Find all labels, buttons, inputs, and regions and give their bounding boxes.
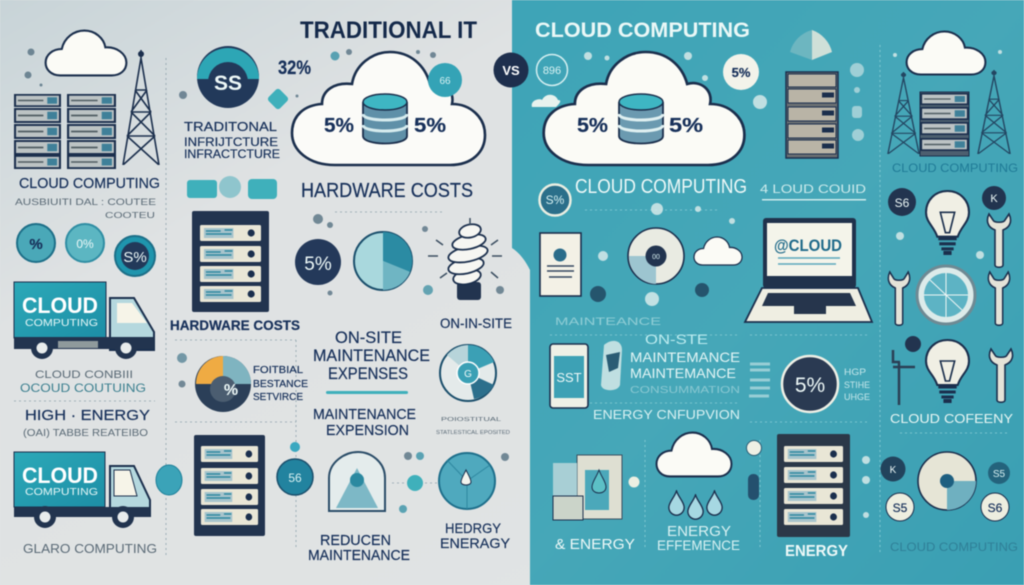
server stack right — [786, 72, 838, 158]
hardware costs heading: HARDWARE COSTS — [301, 180, 473, 202]
segmented circle: G — [464, 369, 472, 380]
teal badge: 66 — [439, 76, 451, 87]
beaker icon — [601, 341, 622, 390]
teal pie with drop — [439, 453, 495, 509]
title: traditional IT: TRADITIONAL IT — [300, 17, 477, 44]
small floating cloud — [532, 95, 560, 107]
background: cloud computing side — [512, 0, 1024, 585]
database icon right — [619, 94, 663, 144]
maintenance faded heading: MAINTEANCE — [555, 316, 661, 328]
pie chart cream: 00 — [652, 254, 660, 261]
cloud computing heading right: CLOUD COMPUTING — [575, 176, 747, 198]
segmented circle — [440, 345, 496, 401]
maintenance expension label — [313, 406, 416, 439]
cloud percentages left: 5% — [414, 115, 446, 137]
truck 1 — [14, 282, 154, 359]
maintenance expension label: EXPENSION — [326, 422, 409, 439]
navy circle 5 percent: 5% — [795, 374, 825, 397]
upper right: tag S6 — [888, 188, 916, 216]
circle 896 — [536, 54, 568, 86]
upper wrench — [987, 214, 1011, 267]
pie side label: FOITBIAL — [253, 365, 303, 376]
secondary cloud label: 4 LOUD COUID — [760, 182, 866, 196]
truck 1: COMPUTING — [25, 318, 98, 329]
phone: SST — [556, 370, 582, 385]
percent 32: 32% — [278, 58, 311, 79]
on-site maintenance heading right: ON-STE — [645, 331, 708, 347]
left column: cloud icon — [46, 31, 126, 75]
truck 1 caption — [20, 369, 146, 395]
upper right: tag S6: S6 — [895, 196, 910, 210]
energy consumption label: ENERGY CNFUPVION — [593, 407, 740, 422]
truck 2: CLOUD — [22, 463, 98, 488]
teal underline — [326, 391, 408, 394]
pie chart with percent: % — [224, 382, 238, 399]
decorative scatter: left panel — [24, 48, 509, 513]
energy efficiency label — [657, 523, 740, 553]
left column: cloud computing label: CLOUD COMPUTING — [19, 175, 160, 192]
center-left: donut chart: SS — [214, 72, 242, 95]
small cloud right — [694, 237, 742, 265]
bottom right badges: S5 — [993, 469, 1006, 480]
right column: cloud computing label: CLOUD COMPUTING — [892, 161, 1018, 175]
teal bubble — [156, 465, 182, 495]
white circle 5 percent: 5% — [732, 65, 751, 80]
on-site maintenance heading right: MAINTEMANCE — [630, 349, 740, 365]
pie chart cream — [628, 228, 684, 284]
reduced maintenance label — [308, 532, 410, 564]
upper bulb — [926, 191, 969, 253]
cloud percentages left — [324, 115, 446, 137]
server rack 1 — [192, 211, 269, 312]
center-left: donut chart — [197, 46, 259, 108]
left column: sub label — [15, 197, 156, 220]
left lower wrench — [888, 272, 910, 325]
traditional infrastructure label: INFRACTCTURE — [184, 147, 280, 161]
hardware costs label: HARDWARE COSTS — [170, 317, 300, 333]
white circle 5 percent — [723, 54, 759, 90]
stripes — [749, 364, 770, 396]
on-site maintenance expenses heading: MAINTENANCE — [313, 346, 430, 365]
pie side label: SETVIRCE — [253, 392, 303, 403]
cloud coffeeny label: CLOUD COFEENY — [890, 411, 1013, 426]
energy cloud — [656, 433, 732, 476]
small dark tag — [905, 336, 921, 352]
lower tool left — [893, 350, 915, 405]
energy efficiency label: EFFEMENCE — [657, 537, 740, 553]
vs badge: VS — [502, 63, 520, 78]
small label stack: HGP — [844, 367, 866, 377]
pie side label: BESTANCE — [253, 379, 308, 390]
& energy label: & ENERGY — [555, 536, 635, 553]
truck 2 — [14, 452, 150, 528]
big cloud right — [544, 52, 744, 165]
cloud percentages right: 5% — [577, 115, 608, 137]
energy saving bulb — [428, 218, 502, 300]
energy label bottom: ENERGY — [785, 543, 848, 560]
truck 1 caption: CLOUD CONBIII — [35, 369, 133, 381]
upper right: tag K: K — [990, 193, 998, 205]
percent ring: S% — [546, 193, 565, 207]
heavy energy label — [440, 520, 511, 551]
decorative scatter: right panel — [584, 50, 1002, 518]
heavy energy label: HEDRGY — [445, 520, 502, 536]
left column: sub label: AUSBIUITI DAL : COUTEE — [15, 197, 156, 207]
on-site maintenance expenses heading: EXPENSES — [328, 364, 408, 383]
left column: server stacks — [15, 95, 115, 168]
faded pie — [790, 30, 832, 60]
circle 56: 56 — [288, 471, 302, 485]
right column: server stack — [920, 92, 969, 156]
laptop — [745, 218, 872, 322]
cloud percentages left: 5% — [324, 115, 354, 137]
fine print — [436, 417, 510, 436]
heavy energy label: ENERAGY — [440, 535, 511, 551]
server rack 2 — [194, 435, 265, 536]
maintenance dome icon — [329, 452, 385, 511]
lower bulb — [926, 340, 969, 401]
right column: towers — [888, 70, 1010, 154]
on-site maintenance expenses heading — [313, 328, 430, 383]
teal diamond connector — [392, 475, 437, 491]
left column: sub label: COOTEU — [105, 211, 155, 220]
small label stack: UHGE — [844, 392, 870, 402]
bottom right pie — [918, 452, 976, 510]
cloud percentages right: 5% — [669, 115, 703, 137]
right column: cloud icon — [907, 32, 985, 74]
left column: percent circles: S% — [123, 249, 147, 266]
big cloud left — [292, 52, 485, 165]
navy circle 5 percent — [782, 356, 838, 412]
traditional infrastructure label: TRADITONAL — [184, 119, 277, 134]
lower wrench — [989, 349, 1013, 402]
document card — [540, 233, 581, 296]
vs badge — [494, 52, 528, 88]
pie side label — [253, 365, 308, 403]
small white dot — [628, 476, 640, 488]
secondary cloud label — [760, 182, 866, 200]
percent ring — [540, 184, 570, 216]
circle 5 percent — [295, 239, 341, 285]
bottom right badges: K — [890, 465, 897, 476]
right title: cloud computing: CLOUD COMPUTING — [535, 19, 750, 42]
cloud computing label bottom right: CLOUD COMPUTING — [890, 540, 1018, 554]
right lower wrench — [988, 272, 1010, 325]
teal badge — [428, 63, 462, 97]
bubbles under pie — [590, 283, 709, 306]
reduced maintenance label: MAINTENANCE — [308, 547, 410, 564]
small label stack — [844, 367, 870, 402]
cloud percentages right — [577, 115, 703, 137]
bottom right badges: S5 — [893, 501, 908, 515]
energy efficiency label: ENERGY — [667, 523, 731, 540]
left column: percent circles — [17, 224, 155, 276]
high energy sub label: (OAI) TABBE REATEIBO — [23, 428, 148, 439]
truck 1: CLOUD — [22, 293, 98, 318]
circle 5 percent: 5% — [304, 254, 332, 275]
drop dot — [290, 442, 300, 452]
truck 2 caption: GLARO COMPUTING — [23, 541, 157, 556]
fine print: STATLESTICAL EPOSITED — [436, 430, 510, 436]
bottom right badges — [880, 456, 1010, 521]
server rack right — [777, 434, 850, 537]
decorative icons column — [850, 63, 864, 141]
truck 2: COMPUTING — [25, 487, 98, 498]
globe — [917, 266, 975, 324]
truck 1 caption: OCOUD COUTUING — [20, 381, 146, 395]
bottom right badges: S6 — [988, 501, 1003, 515]
laptop: @CLOUD — [774, 236, 842, 255]
left column: radio tower — [123, 50, 159, 165]
phone — [550, 344, 588, 408]
connector icons — [746, 440, 762, 500]
document with drop illustration — [553, 455, 622, 520]
traditional infrastructure label: INFRIJTCTURE — [184, 135, 278, 149]
traditional infrastructure label — [184, 119, 280, 161]
teal icon cluster — [187, 176, 277, 199]
on-in-site label: ON-IN-SITE — [440, 315, 512, 331]
water drops — [669, 491, 722, 519]
on-site maintenance heading right: MAINTEMANCE — [630, 365, 736, 381]
circle 896: 896 — [543, 65, 561, 77]
small label stack: STIHE — [844, 380, 870, 390]
left column: percent circles: % — [29, 236, 43, 253]
upper right: tag K — [982, 186, 1006, 210]
pie chart with percent — [195, 356, 251, 412]
on-site maintenance heading right: CONSUMMATION — [630, 385, 740, 396]
on-site maintenance expenses heading: ON-SITE — [335, 328, 402, 347]
pie chart teal — [354, 232, 412, 290]
maintenance expension label: MAINTENANCE — [313, 406, 416, 423]
fine print: POIOSTITUAL — [441, 417, 501, 423]
database icon left — [363, 94, 407, 144]
small teal diamond — [267, 88, 289, 110]
high energy heading: HIGH · ENERGY — [25, 407, 150, 424]
reduced maintenance label: REDUCEN — [320, 532, 391, 549]
circle 56 — [277, 459, 313, 495]
on-site maintenance heading right — [630, 331, 740, 396]
left column: percent circles: 0% — [76, 237, 94, 251]
